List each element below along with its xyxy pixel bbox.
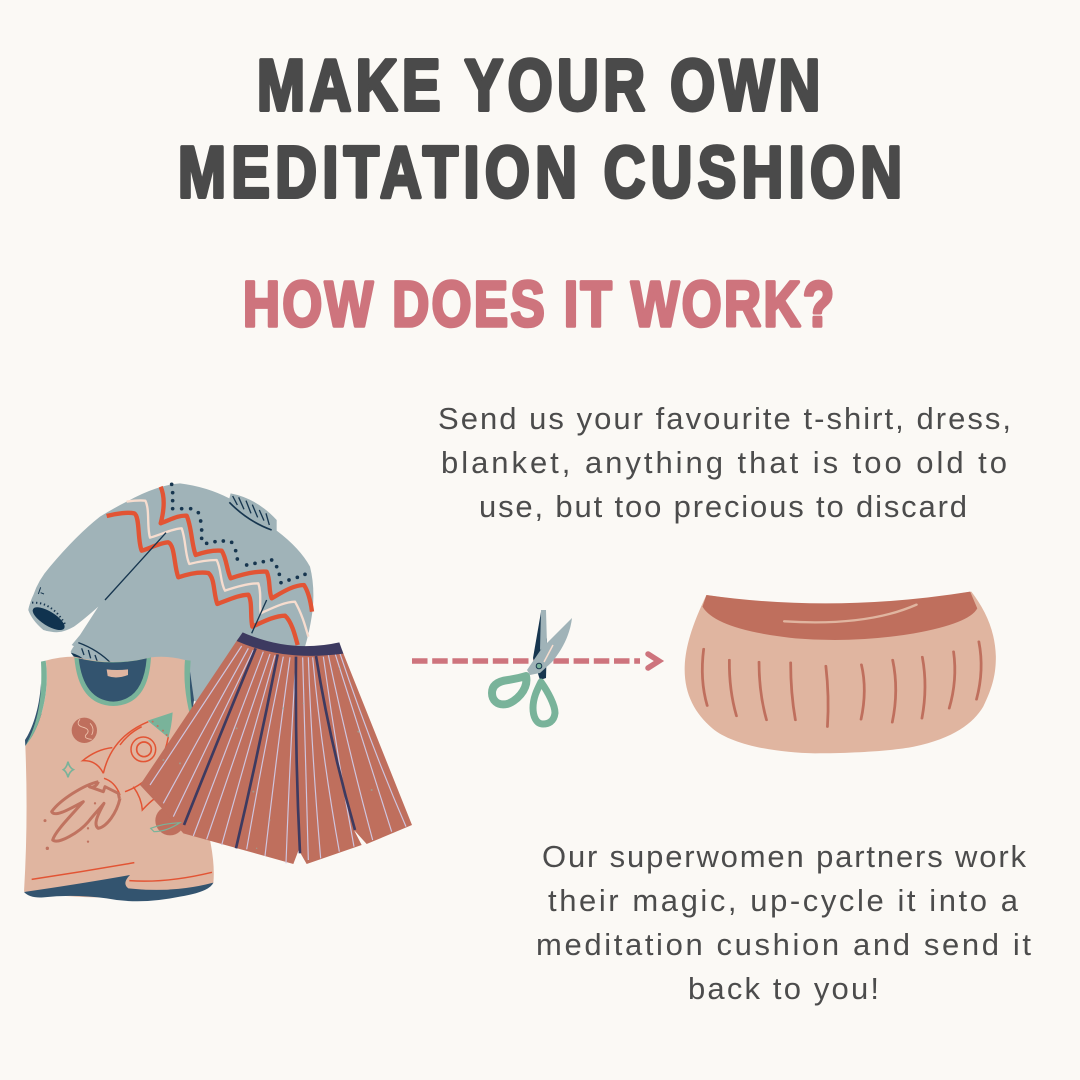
text block: partners upcycle: Our superwomen partners work — [542, 839, 1026, 874]
planet — [72, 718, 97, 743]
sweater — [28, 482, 313, 703]
title — [178, 45, 902, 212]
sweater cuff — [28, 587, 68, 634]
title: MAKE YOUR OWN — [257, 45, 820, 125]
heading: how does it work: HOW DOES IT WORK? — [243, 270, 834, 340]
illustration: pile of clothes — [24, 482, 412, 901]
tank top with rocket — [24, 657, 214, 901]
illustration: finished cushion — [685, 592, 996, 753]
waistband — [237, 632, 343, 656]
star — [63, 762, 73, 777]
text block: send us your item: blanket, anything that is too old to — [441, 445, 1007, 480]
text block: partners upcycle — [536, 839, 1031, 1006]
title: MEDITATION CUSHION — [178, 132, 902, 212]
pleated skirt — [140, 632, 412, 864]
rocket — [43, 712, 173, 850]
text block: partners upcycle: back to you! — [688, 971, 879, 1006]
text block: partners upcycle: their magic, up-cycle it into a — [548, 883, 1019, 918]
text block: send us your item: use, but too precious to discard — [479, 489, 967, 524]
text block: send us your item — [438, 401, 1011, 524]
text block: send us your item: Send us your favourite t-shirt, dress, — [438, 401, 1011, 436]
text block: partners upcycle: meditation cushion and send it — [536, 927, 1031, 962]
arrow: dashed arrow to cushion — [412, 654, 659, 668]
flame trail — [52, 782, 120, 841]
icon: scissors — [492, 610, 572, 724]
